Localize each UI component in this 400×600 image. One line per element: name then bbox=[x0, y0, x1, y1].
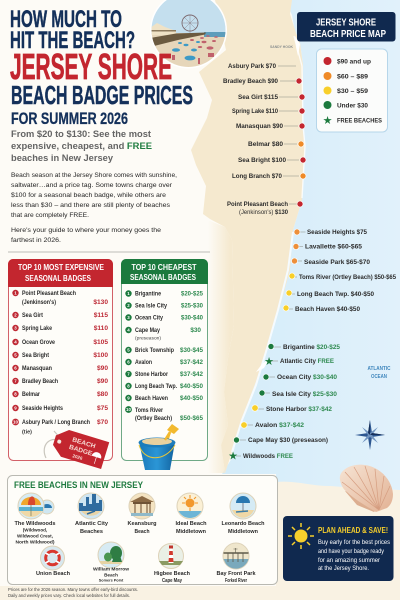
label: Atlantic Ocean: ATLANTIC bbox=[368, 366, 391, 372]
panel: most expensive badges: 2 bbox=[14, 313, 17, 318]
map: north shore prices bbox=[223, 63, 306, 216]
legend: ★ bbox=[323, 115, 333, 127]
panel: cheapest badges: $20-$25 bbox=[181, 290, 203, 298]
beach names: Beach bbox=[104, 572, 118, 578]
map: north shore prices: (Jenkinson's) $130 bbox=[239, 209, 288, 216]
panel: cheapest badges: Cape May bbox=[135, 327, 160, 334]
panel: most expensive badges: 4 bbox=[14, 340, 17, 345]
title bbox=[10, 6, 193, 128]
subheading: From $20 to $130: See the most bbox=[11, 129, 152, 140]
beach names: Forked River bbox=[225, 578, 247, 584]
panel: cheapest badges: 8 bbox=[127, 384, 130, 389]
intro text: less than $30 – and there are still plenty of beaches bbox=[11, 202, 170, 209]
beach names: Cape May bbox=[162, 578, 183, 584]
intro text: farthest in 2026. bbox=[11, 237, 61, 244]
icon: sun bbox=[288, 523, 314, 549]
panel: most expensive badges: Seaside Heights bbox=[22, 405, 63, 412]
panel: most expensive badges: Sea Bright bbox=[22, 352, 49, 359]
map: south shore prices: Atlantic City FREE bbox=[280, 358, 335, 365]
heading: free beaches: FREE BEACHES IN NEW JERSEY bbox=[14, 480, 143, 490]
icon: Bay Front Park pier bbox=[223, 543, 249, 569]
beach names: William Morrow bbox=[93, 566, 129, 572]
title: HOW MUCH TO bbox=[10, 6, 122, 33]
panel: cheapest badges: $50-$65 bbox=[180, 415, 203, 422]
panel: cheapest badges: $30-$45 bbox=[180, 347, 203, 354]
title: BEACH BADGE PRICES bbox=[11, 80, 193, 110]
icon: scallop shell bbox=[340, 465, 393, 512]
map: north shore prices: Long Branch $70 bbox=[232, 173, 282, 180]
panel: most expensive badges: $105 bbox=[93, 339, 108, 346]
intro text bbox=[11, 172, 177, 244]
map: south shore prices: ★ bbox=[228, 450, 238, 462]
map: ocean and land bbox=[191, 0, 400, 490]
intro text: Here's your guide to where your money goes the bbox=[11, 227, 161, 234]
footnote: Daily and weekly prices vary. Check local websites for full details. bbox=[8, 593, 130, 598]
icon: beach badge tag: 2026 bbox=[72, 453, 84, 461]
panel: most expensive badges: 10 bbox=[13, 420, 18, 425]
panel: most expensive badges: 1 bbox=[14, 291, 17, 296]
panel: cheapest badges: 4 bbox=[127, 328, 130, 333]
panel: cheapest badges: $37-$42 bbox=[180, 359, 203, 366]
map: north shore prices: Bradley Beach $90 bbox=[223, 78, 278, 85]
heading: cheapest: SEASONAL BADGES bbox=[130, 272, 196, 282]
icon: beach badge tag bbox=[44, 427, 109, 469]
icon: compass rose bbox=[355, 420, 385, 450]
panel: most expensive badges: (tie) bbox=[22, 430, 32, 436]
panel: most expensive badges: $90 bbox=[97, 365, 108, 372]
beach names: North Wildwood) bbox=[16, 540, 55, 544]
panel: most expensive badges: $130 bbox=[93, 299, 108, 306]
panel: most expensive badges: Belmar bbox=[22, 391, 41, 398]
map: central shore prices: Seaside Heights $75 bbox=[307, 229, 367, 236]
icon: The Wildwoods bbox=[18, 493, 54, 519]
panel: most expensive badges: $75 bbox=[97, 405, 108, 412]
panel: cheapest badges: 5 bbox=[127, 348, 130, 353]
icon: beach badge tag: BEACH bbox=[71, 437, 97, 450]
panel: most expensive badges: $100 bbox=[93, 352, 108, 359]
panel: most expensive badges: 8 bbox=[14, 392, 17, 397]
map: central shore prices: Long Beach Twp. $40-$50 bbox=[297, 291, 374, 298]
map: south shore prices: Cape May $30 (preseason) bbox=[248, 437, 328, 444]
map: south shore prices: Brigantine $20-$25 bbox=[283, 344, 340, 351]
map: south shore prices: Stone Harbor $37-$42 bbox=[266, 406, 332, 413]
panel: most expensive badges: $80 bbox=[97, 391, 108, 398]
callout: plan ahead bbox=[283, 516, 394, 581]
beach names: Union Beach bbox=[36, 571, 70, 577]
map: north shore prices: Sea Girt $115 bbox=[238, 94, 278, 101]
panel: cheapest badges: Brick Township bbox=[135, 347, 174, 354]
callout: plan ahead: and have your badge ready bbox=[318, 549, 384, 555]
beach photo bbox=[150, 0, 228, 70]
legend: FREE BEACHES bbox=[337, 118, 382, 124]
footnote: Prices are for the 2026 season. Many towns offer early-bird discounts. bbox=[8, 587, 138, 592]
icon: Leonardo Beach bbox=[230, 493, 256, 519]
panel: most expensive badges: 7 bbox=[14, 379, 17, 384]
callout: plan ahead: Buy early for the best prices bbox=[318, 540, 390, 546]
panel: cheapest badges: Ocean City bbox=[135, 314, 163, 322]
panel: most expensive badges: 6 bbox=[14, 366, 17, 371]
map: south shore prices bbox=[228, 344, 340, 462]
panel: most expensive badges: Sea Girt bbox=[22, 312, 43, 319]
beach names: Beach bbox=[134, 529, 150, 535]
subheading bbox=[11, 129, 153, 164]
panel: cheapest badges: 9 bbox=[127, 396, 130, 401]
beach names: Middletown bbox=[176, 529, 206, 535]
icon: Atlantic City bbox=[78, 493, 104, 519]
beach names bbox=[14, 521, 265, 584]
heading: most expensive: TOP 10 MOST EXPENSIVE bbox=[18, 262, 104, 272]
panel: cheapest badges: $37-$42 bbox=[180, 371, 203, 378]
panel: cheapest badges bbox=[121, 259, 208, 460]
panel: most expensive badges: 3 bbox=[14, 326, 17, 331]
panel: most expensive badges: Bradley Beach bbox=[22, 378, 58, 385]
map: south shore prices: ★ bbox=[264, 356, 274, 368]
beach sand bbox=[0, 482, 400, 600]
map leader lines bbox=[236, 66, 306, 456]
panel: cheapest badges: Stone Harbor bbox=[135, 371, 168, 378]
legend: Under $30 bbox=[337, 102, 368, 110]
callout: plan ahead: for an amazing summer bbox=[318, 558, 380, 564]
heading: cheapest bbox=[130, 262, 197, 282]
panel: cheapest badges: $25-$30 bbox=[181, 302, 203, 310]
intro text: saltwater…and a price tag. Some towns charge over bbox=[11, 182, 173, 189]
intro text: $100 for a seasonal beach badge, while others are bbox=[11, 192, 166, 199]
label: Atlantic Ocean bbox=[368, 366, 391, 380]
panel: most expensive badges: Manasquan bbox=[22, 365, 52, 372]
panel: cheapest badges: 6 bbox=[127, 360, 130, 365]
subheading: expensive, cheapest, and FREE bbox=[11, 141, 153, 152]
icon: sand bucket and shovel bbox=[138, 424, 179, 470]
panel: cheapest badges: (preseason) bbox=[135, 336, 161, 342]
beach names: (Wildwood, bbox=[23, 528, 47, 532]
panel: most expensive badges: $110 bbox=[94, 325, 108, 332]
panel: most expensive badges: $70 bbox=[97, 419, 108, 426]
panel: cheapest badges: Avalon bbox=[135, 359, 152, 366]
panel: cheapest badges: Long Beach Twp. bbox=[135, 383, 177, 390]
icon: Ideal Beach bbox=[177, 493, 203, 519]
callout: plan ahead: at the Jersey Shore. bbox=[318, 566, 369, 572]
heading: cheapest: TOP 10 CHEAPEST bbox=[132, 262, 197, 272]
panel: cheapest badges: Brigantine bbox=[135, 290, 161, 298]
panel: cheapest badges: 7 bbox=[127, 372, 130, 377]
icon: beach badge tag: BADGE bbox=[68, 444, 94, 458]
panel: cheapest badges: 2 bbox=[127, 303, 130, 308]
map: south shore prices: Wildwoods FREE bbox=[243, 453, 294, 460]
panel: most expensive badges: 9 bbox=[14, 406, 17, 411]
panel: most expensive badges: $90 bbox=[97, 378, 108, 385]
beach names: Higbee Beach bbox=[154, 571, 190, 577]
panel: most expensive badges: Spring Lake bbox=[22, 325, 52, 332]
beach names: Wildwood Crest, bbox=[17, 534, 53, 538]
panel: cheapest badges: $30 bbox=[190, 327, 201, 334]
map: north shore prices: Belmar $80 bbox=[248, 141, 283, 148]
panel: cheapest badges: (Ortley Beach) bbox=[135, 415, 172, 422]
panel: free beaches bbox=[8, 476, 278, 584]
beach names: Middletown bbox=[228, 529, 258, 535]
legend: $30 – $59 bbox=[337, 88, 368, 95]
icon: Union Beach bbox=[40, 546, 64, 570]
subheading: beaches in New Jersey bbox=[11, 153, 114, 164]
map: north shore prices: Manasquan $90 bbox=[236, 123, 283, 130]
beach names: Ideal Beach bbox=[176, 521, 207, 527]
panel: most expensive badges: 5 bbox=[14, 353, 17, 358]
map: north shore prices: Spring Lake $110 bbox=[232, 108, 278, 115]
map: central shore prices: Seaside Park $65-$70 bbox=[304, 259, 370, 266]
panel: cheapest badges: 10 bbox=[126, 407, 131, 412]
icon: William Morrow Beach bbox=[98, 542, 124, 568]
map: central shore prices: Beach Haven $40-$50 bbox=[295, 306, 360, 313]
heading: most expensive: SEASONAL BADGES bbox=[25, 273, 91, 283]
label: Sandy Hook: SANDY HOOK bbox=[270, 45, 293, 49]
map: central shore prices: Lavallette $60-$65 bbox=[305, 244, 362, 250]
map: north shore prices: Sea Bright $100 bbox=[238, 157, 286, 164]
icon: Higbee Beach lighthouse bbox=[158, 544, 184, 568]
beach names: Atlantic City bbox=[75, 521, 109, 527]
footnote bbox=[8, 587, 138, 598]
panel: cheapest badges: $40-$50 bbox=[180, 383, 203, 390]
intro text: that are completely FREE. bbox=[11, 212, 89, 219]
panel: cheapest badges: $30-$40 bbox=[181, 314, 203, 322]
title: HIT THE BEACH? bbox=[10, 27, 135, 54]
legend: $90 and up bbox=[337, 58, 371, 66]
map: south shore prices: Sea Isle City $25-$30 bbox=[272, 391, 337, 398]
map: north shore prices: Point Pleasant Beach bbox=[227, 201, 288, 208]
beach names: Beaches bbox=[80, 529, 103, 535]
panel: most expensive badges: $115 bbox=[94, 312, 108, 319]
panel: most expensive badges bbox=[8, 259, 113, 460]
panel: most expensive badges: Ocean Grove bbox=[22, 339, 55, 346]
panel: most expensive badges: Asbury Park / Long Branch bbox=[22, 419, 90, 426]
panel: cheapest badges: $40-$50 bbox=[180, 395, 203, 402]
panel: most expensive badges: (Jenkinson's) bbox=[22, 299, 56, 306]
map title: JERSEY SHORE bbox=[316, 18, 376, 28]
title: JERSEY SHORE bbox=[10, 46, 172, 87]
beach names: Bay Front Park bbox=[216, 571, 256, 577]
beach names: Somers Point bbox=[99, 578, 124, 582]
beach names: Leonardo Beach bbox=[222, 521, 265, 527]
panel: cheapest badges: Beach Haven bbox=[135, 395, 168, 402]
map: south shore prices: Avalon $37-$42 bbox=[255, 422, 304, 429]
label: Atlantic Ocean: OCEAN bbox=[371, 374, 387, 380]
intro text: Beach season at the Jersey Shore comes with sunshine, bbox=[11, 172, 177, 179]
beach names: The Wildwoods bbox=[14, 521, 56, 527]
heading: most expensive bbox=[18, 262, 104, 283]
legend bbox=[316, 49, 388, 132]
panel: cheapest badges: Toms River bbox=[135, 407, 163, 414]
icon: Keansburg bbox=[129, 493, 155, 519]
map: central shore prices bbox=[283, 229, 396, 313]
panel: cheapest badges: 1 bbox=[127, 291, 130, 296]
map title bbox=[297, 12, 396, 42]
title: FOR SUMMER 2026 bbox=[11, 109, 128, 128]
panel: cheapest badges: 3 bbox=[127, 315, 130, 320]
map: north shore prices: Asbury Park $70 bbox=[228, 63, 276, 70]
panel: most expensive badges: Point Pleasant Beach bbox=[22, 290, 76, 297]
legend: $60 – $89 bbox=[337, 74, 368, 80]
beach names: Keansburg bbox=[128, 521, 157, 527]
panel: cheapest badges: Sea Isle City bbox=[135, 302, 167, 310]
map: south shore prices: Ocean City $30-$40 bbox=[277, 374, 337, 381]
